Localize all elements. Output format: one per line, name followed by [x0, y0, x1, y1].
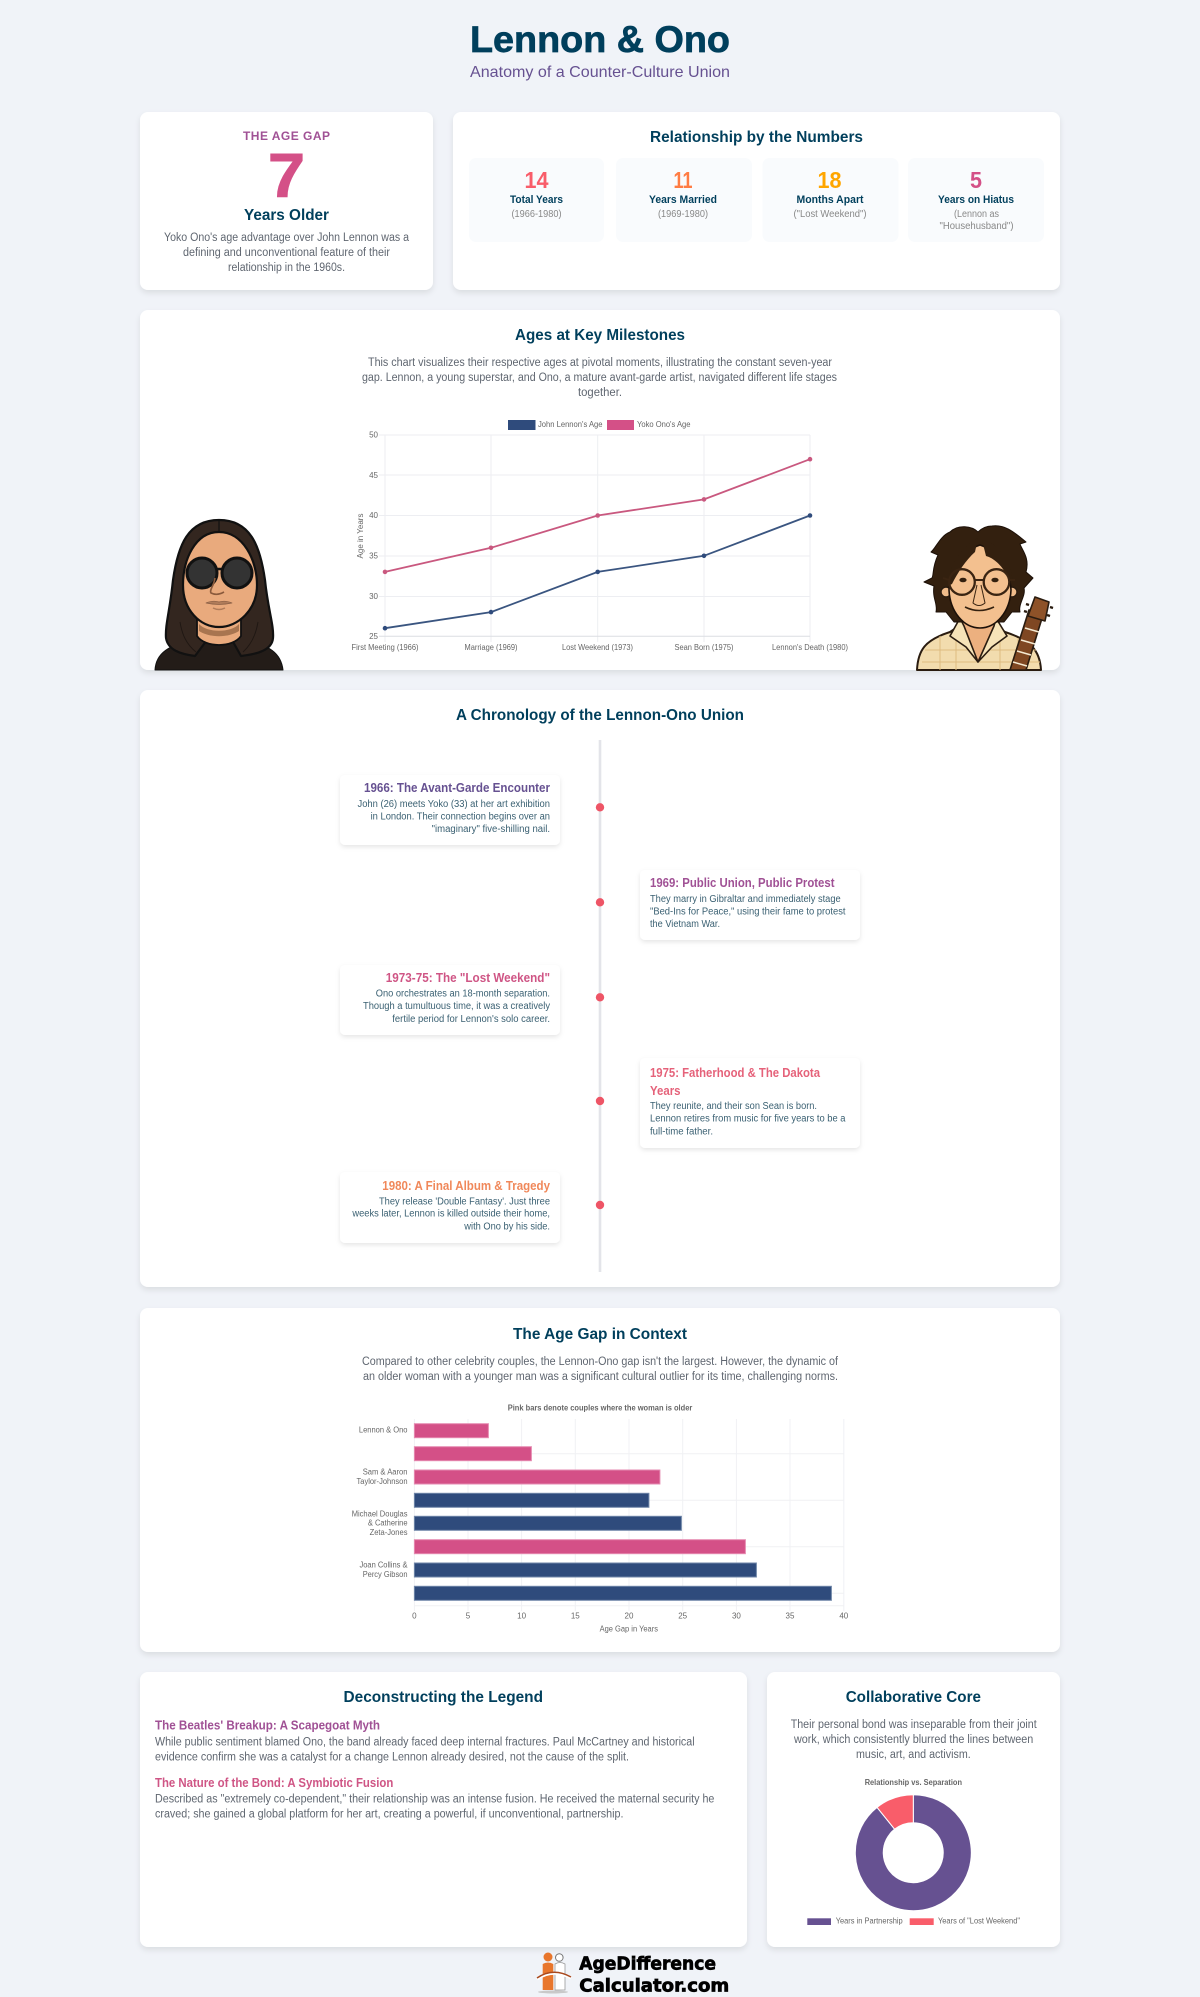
donut chart [807, 1778, 1020, 1926]
panel: relationship by the numbers [453, 112, 1060, 290]
donut legend [807, 1917, 1020, 1926]
title block [470, 19, 730, 81]
context description: Compared to other celebrity couples, the Lennon-Ono gap isn't the largest. However, the dynamic of [362, 1356, 839, 1368]
legend heading: Deconstructing the Legend [344, 1689, 543, 1706]
timeline event: 1969: 1969: Public Union, Public Protest [650, 876, 835, 890]
panel: collaborative core [767, 1672, 1060, 1947]
context description: an older woman with a younger man was a significant cultural outlier for its time, challenging norms. [363, 1371, 838, 1383]
panel: age gap in context [140, 1308, 1060, 1652]
collaborative description: music, art, and activism. [856, 1749, 971, 1761]
stat: months apart [762, 158, 898, 242]
stat: months apart: 18 [818, 167, 842, 193]
donut chart: Relationship vs. Separation [865, 1778, 962, 1787]
timeline event: 1973-75 [340, 965, 560, 1035]
bar chart x axis labels: 10 [517, 1612, 527, 1621]
myth: nature of the bond [155, 1776, 714, 1821]
timeline dot: 1975 [596, 1097, 604, 1105]
milestones description: gap. Lennon, a young superstar, and Ono, a mature avant-garde artist, navigated different life stages [362, 372, 837, 384]
bar chart category labels: Sam & Aaron [363, 1468, 408, 1477]
timeline event: 1969: the Vietnam War. [650, 919, 720, 930]
bar chart title: Pink bars denote couples where the woman is older [508, 1404, 692, 1413]
timeline event: 1980: They release 'Double Fantasy'. Just three [379, 1196, 550, 1207]
milestones description: This chart visualizes their respective ages at pivotal moments, illustrating the constant seven-year [368, 357, 832, 369]
bar chart x axis labels: 15 [571, 1612, 580, 1621]
y axis labels: 45 [369, 471, 379, 480]
stat: total years: (1966-1980) [512, 209, 562, 220]
milestones description [362, 357, 837, 399]
line: Yoko Ono [383, 457, 812, 574]
subtitle: Anatomy of a Counter-Culture Union [470, 64, 730, 81]
y axis labels: 25 [369, 632, 379, 641]
stat: years married: (1969-1980) [658, 209, 708, 220]
chart legend: Yoko Ono's Age [637, 420, 691, 429]
myth: beatles breakup [155, 1718, 695, 1763]
stat: years on hiatus: (Lennon as [954, 209, 999, 220]
stat: years married: 11 [674, 167, 693, 193]
timeline event: 1966 [340, 775, 560, 845]
x axis labels: First Meeting (1966) [352, 643, 419, 652]
stat: years on hiatus: Years on Hiatus [938, 194, 1014, 206]
bar chart category labels: Lennon & Ono [359, 1426, 408, 1435]
y axis title: Age in Years [356, 514, 365, 558]
y axis labels [369, 430, 379, 641]
timeline dot: 1966 [596, 803, 604, 812]
timeline event: 1973-75: 1973-75: The "Lost Weekend" [386, 971, 550, 985]
logo: AgeDifferenceCalculator.com [537, 1952, 729, 1997]
stat: years on hiatus [908, 158, 1044, 242]
y axis labels: 50 [369, 430, 379, 440]
timeline event: 1966: in London. Their connection begins over an [371, 812, 550, 822]
years older: Years Older [244, 207, 329, 224]
big number 7: 7 [268, 142, 305, 211]
timeline dot: 1969 [596, 898, 604, 906]
bar chart x axis labels [412, 1612, 849, 1621]
myth: nature of the bond: Described as "extremely co-dependent," their relationship was an intense fusion. He received the maternal security he [155, 1794, 714, 1806]
stat: years married: Years Married [649, 194, 717, 206]
context heading: The Age Gap in Context [513, 1326, 688, 1343]
chronology heading: A Chronology of the Lennon-Ono Union [456, 707, 744, 724]
bar chart category labels: Joan Collins & [360, 1561, 408, 1570]
timeline event: 1975 [640, 1058, 860, 1148]
timeline dot: 1980 [596, 1201, 604, 1209]
stat: total years [469, 158, 604, 242]
timeline event: 1969: "Bed-Ins for Peace," using their fame to protest [650, 906, 846, 918]
bar chart x axis labels: 25 [678, 1612, 688, 1621]
myth: beatles breakup: While public sentiment blamed Ono, the band already faced deep internal fractures. Paul McCartney and historical [155, 1736, 695, 1748]
timeline event: 1973-75: Ono orchestrates an 18-month separation. [376, 989, 550, 1000]
y axis labels: 35 [369, 552, 379, 560]
logo wordmark [579, 1953, 729, 1997]
panel: chronology timeline [140, 690, 1060, 1287]
age gap description: Yoko Ono's age advantage over John Lennon was a [164, 232, 410, 244]
panel: the age gap [140, 112, 433, 290]
donut legend: Years in Partnership [836, 1917, 903, 1926]
timeline event: 1975: They reunite, and their son Sean is born. [650, 1101, 817, 1112]
x axis labels: Marriage (1969) [464, 643, 518, 652]
timeline event: 1975: 1975: Fatherhood & The Dakota [650, 1066, 821, 1080]
timeline event: 1980: weeks later, Lennon is killed outside their home, [351, 1209, 550, 1220]
timeline dot: 1973 [596, 993, 604, 1002]
age gap description: defining and unconventional feature of their [183, 247, 390, 259]
logo wordmark: Calculator.com [579, 1976, 729, 1997]
bar chart x axis labels: 35 [786, 1612, 795, 1621]
numbers heading: Relationship by the Numbers [650, 129, 863, 146]
x axis labels: Lennon's Death (1980) [772, 643, 848, 652]
bar chart x axis labels: 5 [466, 1612, 471, 1621]
myth: nature of the bond: craved; she gained a global platform for her art, creating a powerful, if unconventional, partnership. [155, 1809, 624, 1821]
collaborative description [791, 1719, 1037, 1761]
stat: months apart: ("Lost Weekend") [794, 209, 866, 220]
line chart: ages [352, 420, 848, 652]
timeline event: 1969 [640, 870, 860, 940]
myth: beatles breakup: evidence confirm she was a catalyst for a change Lennon already desired, not the cause of the split. [155, 1751, 629, 1763]
stat: years on hiatus: 5 [970, 167, 982, 193]
collaborative description: work, which consistently blurred the lines between [793, 1734, 1033, 1746]
title: Lennon & Ono [470, 19, 730, 60]
panel: deconstructing the legend [140, 1672, 747, 1947]
timeline event: 1973-75: fertile period for Lennon's solo career. [392, 1014, 550, 1025]
age gap description: relationship in the 1960s. [228, 262, 345, 274]
stat: total years: Total Years [510, 194, 563, 206]
bar chart category labels: Percy Gibson [363, 1570, 408, 1579]
timeline event: 1975: full-time father. [650, 1126, 713, 1137]
timeline event: 1966: 1966: The Avant-Garde Encounter [364, 781, 550, 795]
chart legend: John Lennon's Age [538, 420, 603, 429]
icon: Yoko Ono avatar [155, 520, 283, 670]
timeline axis [599, 740, 601, 1272]
collaborative description: Their personal bond was inseparable from their joint [791, 1719, 1037, 1731]
collaborative heading: Collaborative Core [846, 1689, 981, 1706]
timeline event: 1966: "imaginary" five-shilling nail. [432, 824, 550, 835]
bar chart category labels [352, 1426, 408, 1579]
milestones heading: Ages at Key Milestones [515, 327, 685, 344]
bar chart category labels: Zeta-Jones [370, 1528, 408, 1537]
bar chart category labels: Michael Douglas [352, 1510, 408, 1519]
icon: John Lennon avatar [917, 526, 1053, 670]
logo wordmark: AgeDifference [579, 1953, 716, 1974]
timeline event: 1980: with Ono by his side. [463, 1221, 550, 1232]
y axis labels: 30 [369, 592, 379, 601]
icon: logo couple [537, 1952, 571, 1994]
guitar [1010, 597, 1053, 670]
bar chart x axis labels: 40 [839, 1612, 849, 1621]
bar chart axis title: Age Gap in Years [600, 1625, 658, 1634]
line: John Lennon [383, 513, 812, 630]
myth: beatles breakup: The Beatles' Breakup: A Scapegoat Myth [155, 1718, 380, 1732]
myth: nature of the bond: The Nature of the Bond: A Symbiotic Fusion [155, 1776, 393, 1790]
milestones description: together. [578, 387, 622, 399]
timeline event: 1975: Years [650, 1084, 681, 1098]
bar chart x axis labels: 0 [412, 1612, 417, 1621]
timeline event: 1980 [340, 1172, 560, 1243]
chart legend [508, 420, 691, 430]
x axis labels: Sean Born (1975) [674, 643, 734, 652]
x axis labels [352, 643, 848, 652]
timeline event: 1973-75: Though a tumultuous time, it was a creatively [363, 1001, 550, 1012]
context description [362, 1356, 839, 1383]
label: the age gap: THE AGE GAP [243, 129, 330, 143]
donut legend: Years of "Lost Weekend" [938, 1917, 1020, 1926]
panel: ages at key milestones [140, 310, 1060, 670]
timeline event: 1969: They marry in Gibraltar and immediately stage [650, 894, 841, 905]
bar chart category labels: Taylor-Johnson [356, 1477, 408, 1486]
bar chart x axis labels: 20 [625, 1612, 634, 1621]
bar chart category labels: & Catherine [368, 1519, 408, 1528]
x axis labels: Lost Weekend (1973) [562, 643, 633, 652]
timeline event: 1975: Lennon retires from music for five years to be a [650, 1114, 846, 1125]
stat: total years: 14 [524, 167, 549, 193]
timeline event: 1966: John (26) meets Yoko (33) at her art exhibition [358, 799, 550, 810]
stat: years on hiatus: "Househusband") [940, 221, 1014, 232]
age gap description [164, 232, 410, 274]
bar chart x axis labels: 30 [732, 1612, 741, 1621]
stat: years married [616, 158, 752, 242]
stat: months apart: Months Apart [796, 194, 864, 206]
timeline event: 1980: 1980: A Final Album & Tragedy [382, 1179, 550, 1193]
bar chart: age gaps [352, 1404, 849, 1634]
y axis labels: 40 [369, 511, 379, 520]
